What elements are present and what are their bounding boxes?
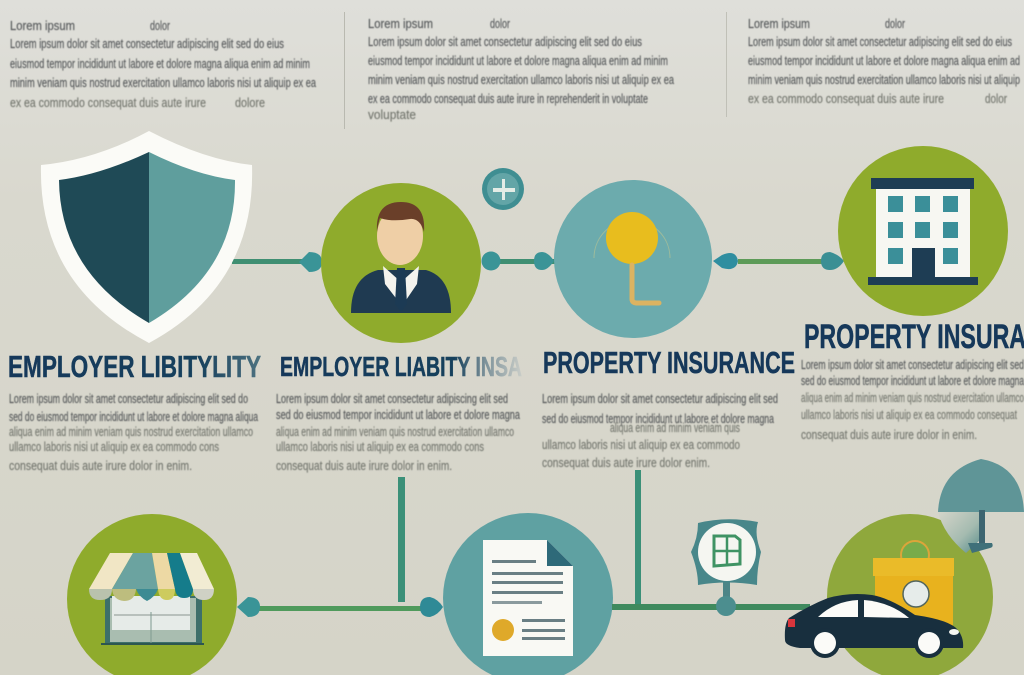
text block: top middle (368, 16, 675, 122)
icon: person (351, 202, 451, 313)
text block: top right (748, 16, 1020, 106)
text block: employer 2: sed do eiusmod tempor incididunt ut labore et dolore magna (276, 407, 521, 422)
text block: top middle: ex ea commodo consequat duis aute irure in reprehenderit in voluptate (368, 91, 648, 106)
text block: employer 2: consequat duis aute irure dolor in enim. (276, 458, 452, 473)
divider line 1 (344, 12, 345, 129)
text block: top left: Lorem ipsum dolor sit amet consectetur adipiscing elit sed do eius (10, 36, 284, 51)
text block: property 2 (801, 357, 1024, 442)
icon: document (483, 540, 573, 656)
text block: top right: ex ea commodo consequat duis aute irure (748, 91, 944, 106)
connector: bottom right (612, 470, 810, 616)
circle: building icon (838, 146, 1008, 316)
icon: building (868, 178, 978, 285)
text block: property 1: ullamco laboris nisi ut aliquip ex ea commodo (542, 437, 740, 452)
text block: employer 2 (276, 391, 521, 473)
icon: yellow package (873, 541, 954, 626)
text block: property 1: sed do eiusmod tempor incididunt ut labore et dolore magna (542, 411, 775, 426)
icon: yellow sphere (594, 212, 670, 303)
icon: plus badge (482, 168, 524, 210)
connector: shield to employer circle (232, 252, 322, 272)
heading: employer liability 1: EMPLOYER LIBITYLITY (8, 349, 261, 384)
text block: property 1: Lorem ipsum dolor sit amet consectetur adipiscing elit sed (542, 391, 778, 406)
text block: employer 1 (9, 391, 258, 473)
text block: employer 1: aliqua enim ad minim veniam quis nostrud exercitation ullamco (9, 424, 253, 439)
text block: property 1: consequat duis aute irure dolor enim. (542, 455, 710, 470)
text block: employer 1: consequat duis aute irure dolor in enim. (9, 458, 192, 473)
text block: property 2: consequat duis aute irure dolor in enim. (801, 427, 977, 442)
circle: car and package icon (785, 514, 993, 675)
text block: top middle: minim veniam quis nostrud exercitation ullamco laboris nisi ut aliquip ex ea (368, 72, 675, 87)
text block: top left: Lorem ipsum (10, 18, 75, 33)
text block: top middle: dolor (490, 16, 510, 31)
heading: employer liability 2: EMPLOYER LIABITY INSA (280, 351, 522, 382)
connector: property to building (713, 252, 844, 270)
text block: employer 1: sed do eiusmod tempor incididunt ut labore et dolore magna aliqua (9, 409, 258, 424)
text block: property 1: aliqua enim ad minim veniam quis (610, 420, 740, 435)
text block: employer 1: ullamco laboris nisi ut aliquip ex ea commodo cons (9, 439, 219, 454)
circle: employer icon (321, 183, 481, 343)
circle: document icon (443, 513, 613, 675)
divider line 2 (726, 12, 727, 117)
text block: top middle: Lorem ipsum (368, 16, 433, 31)
text block: top middle: voluptate (368, 107, 416, 122)
text block: top right: dolor (985, 91, 1007, 106)
text block: top left: eiusmod tempor incididunt ut labore et dolore magna aliqua enim ad minim (10, 56, 310, 71)
text block: top left: minim veniam quis nostrud exercitation ullamco laboris nisi ut aliquip ex ea (10, 75, 317, 90)
text block: employer 2: aliqua enim ad minim veniam quis nostrud exercitation ullamco (276, 424, 514, 439)
text block: top left: ex ea commodo consequat duis aute irure (10, 95, 206, 110)
text block: top left: dolore (235, 95, 265, 110)
icon: small badge (691, 519, 761, 585)
circle: storefront icon (67, 514, 237, 675)
connector: employer to property (482, 252, 555, 270)
text block: employer 1: Lorem ipsum dolor sit amet consectetur adipiscing elit sed do (9, 391, 248, 406)
text block: top middle: Lorem ipsum dolor sit amet consectetur adipiscing elit sed do eius (368, 34, 642, 49)
icon: storefront (89, 553, 214, 645)
text block: employer 2: Lorem ipsum dolor sit amet consectetur adipiscing elit sed (276, 391, 508, 406)
text block: top right: Lorem ipsum (748, 16, 810, 31)
icon: car (785, 594, 963, 658)
text block: top right: dolor (885, 16, 905, 31)
connector: bottom left (237, 477, 443, 617)
circle: umbrella bulb icon (554, 180, 712, 338)
text block: top middle: eiusmod tempor incididunt ut labore et dolore magna aliqua enim ad minim (368, 53, 668, 68)
text block: property 1 (542, 391, 778, 470)
text block: top left (10, 18, 317, 110)
text block: employer 2: ullamco laboris nisi ut aliquip ex ea commodo cons (276, 439, 484, 454)
icon: shield (41, 131, 252, 343)
heading: property insurance 1: PROPERTY INSURANCE (543, 345, 795, 380)
text block: top left: dolor (150, 18, 170, 33)
icon: umbrella (938, 459, 1024, 553)
